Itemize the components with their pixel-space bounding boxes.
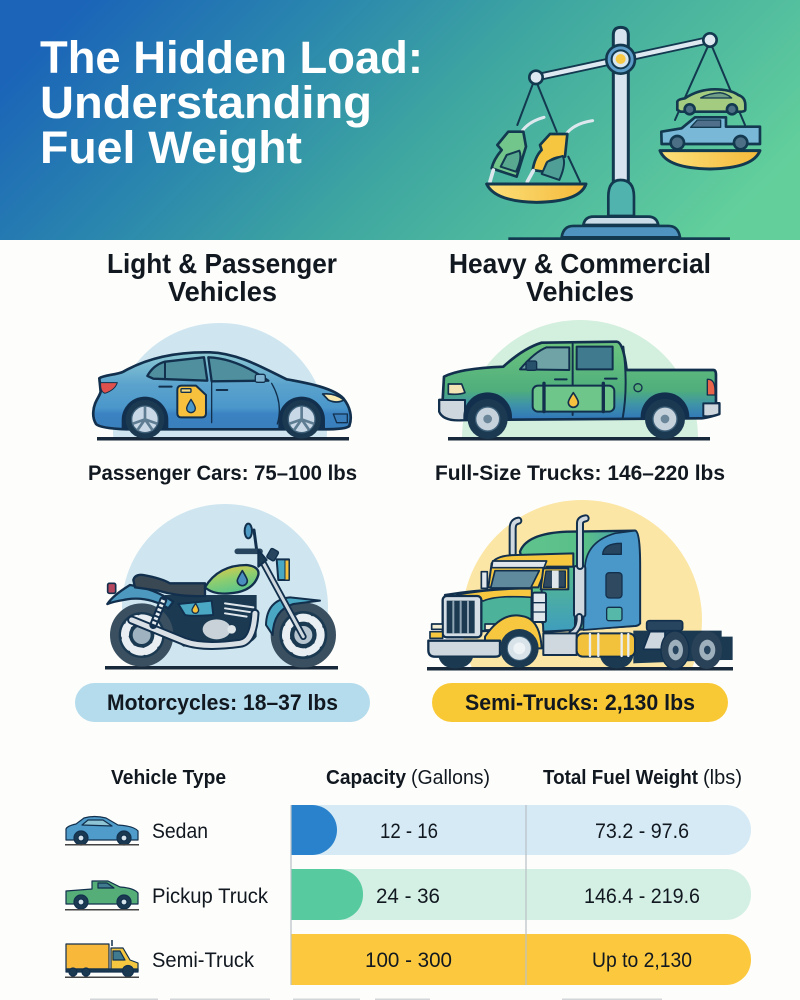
- table header: [111, 767, 742, 789]
- icon: sedan with fuel can: [93, 352, 351, 439]
- label: passenger cars: Passenger Cars: 75–100 lbs: [88, 462, 357, 485]
- heading: heavy and commercial vehicles: Heavy & Commercial: [449, 248, 711, 279]
- row: pickup truck: 24 - 36: [376, 885, 440, 908]
- row: sedan: 73.2 - 97.6: [595, 820, 689, 843]
- right nozzle yellow: [527, 121, 593, 182]
- roof and windshield: [488, 553, 573, 587]
- table header: (Gallons): [411, 767, 490, 789]
- rear fender: [107, 585, 173, 608]
- icon: balance scale with fuel nozzles and vehicles: [487, 27, 760, 240]
- heading: light and passenger vehicles: Light & Passenger: [107, 248, 337, 279]
- label: motorcycles: [75, 683, 370, 722]
- panel: semi-truck: [427, 500, 733, 740]
- table header: Total Fuel Weight: [543, 767, 698, 789]
- panel: passenger car: [89, 323, 356, 484]
- table header: Capacity: [326, 767, 407, 789]
- seat: [133, 575, 205, 596]
- left nozzle green: [490, 117, 544, 182]
- heading: heavy and commercial vehicles: Vehicles: [526, 276, 634, 307]
- title: The Hidden Load:: [40, 32, 423, 83]
- row: semi-truck: 100 - 300: [365, 949, 452, 972]
- table: vehicle fuel weights: [65, 767, 751, 1000]
- label: full-size trucks: Full-Size Trucks: 146–220 lbs: [435, 462, 725, 485]
- row: semi-truck: Semi-Truck: [152, 949, 254, 972]
- icon: small sedan: [65, 816, 139, 846]
- label: semi-trucks: Semi-Trucks: 2,130 lbs: [465, 690, 695, 715]
- row: sedan: Sedan: [152, 820, 208, 843]
- hood: [445, 589, 532, 633]
- cut-off bottom row: [90, 998, 662, 1000]
- right pan: [660, 151, 760, 169]
- icon: pickup truck with tank: [439, 342, 719, 439]
- light green car: [677, 89, 745, 114]
- title: [40, 32, 423, 173]
- table header: (lbs): [703, 767, 742, 789]
- pedestal: [608, 180, 634, 216]
- door: [541, 567, 575, 632]
- row: pickup truck: Pickup Truck: [152, 885, 268, 908]
- row: pickup truck: 146.4 - 219.6: [584, 885, 700, 908]
- fork and handlebars: [262, 560, 303, 637]
- icon: semi-truck: [428, 518, 733, 669]
- panel: full-size truck: [436, 320, 724, 480]
- side tank: [533, 386, 614, 412]
- fuel can: [177, 386, 206, 417]
- row: semi-truck: Up to 2,130: [592, 949, 692, 972]
- exhaust: [132, 613, 255, 645]
- blue pickup: [661, 117, 760, 149]
- row: sedan: [65, 816, 689, 846]
- icon: small pickup: [65, 881, 139, 910]
- header banner: [0, 0, 800, 240]
- tank: [205, 565, 259, 594]
- wheels: [114, 608, 169, 662]
- icon: small box truck: [65, 940, 139, 978]
- row: sedan: 12 - 16: [380, 820, 438, 843]
- heading: heavy and commercial vehicles: [449, 248, 711, 307]
- panel: motorcycle: [75, 504, 370, 722]
- label: semi-trucks: [432, 683, 728, 722]
- row bars: [291, 805, 751, 985]
- front fender: [266, 597, 320, 635]
- heading: light and passenger vehicles: [107, 248, 337, 307]
- title: Understanding: [40, 77, 372, 128]
- row: pickup truck: [65, 881, 700, 910]
- vertical stack: [574, 566, 585, 617]
- wheels: [463, 392, 512, 419]
- shock: [153, 600, 163, 625]
- heading: light and passenger vehicles: Vehicles: [168, 276, 277, 307]
- row: semi-truck: [65, 940, 692, 978]
- title: Fuel Weight: [40, 122, 302, 173]
- wheels: [122, 397, 168, 429]
- left pan: [487, 184, 586, 202]
- icon: motorcycle: [107, 524, 332, 663]
- table header: Vehicle Type: [111, 767, 226, 789]
- label: motorcycles: Motorcycles: 18–37 lbs: [107, 690, 338, 715]
